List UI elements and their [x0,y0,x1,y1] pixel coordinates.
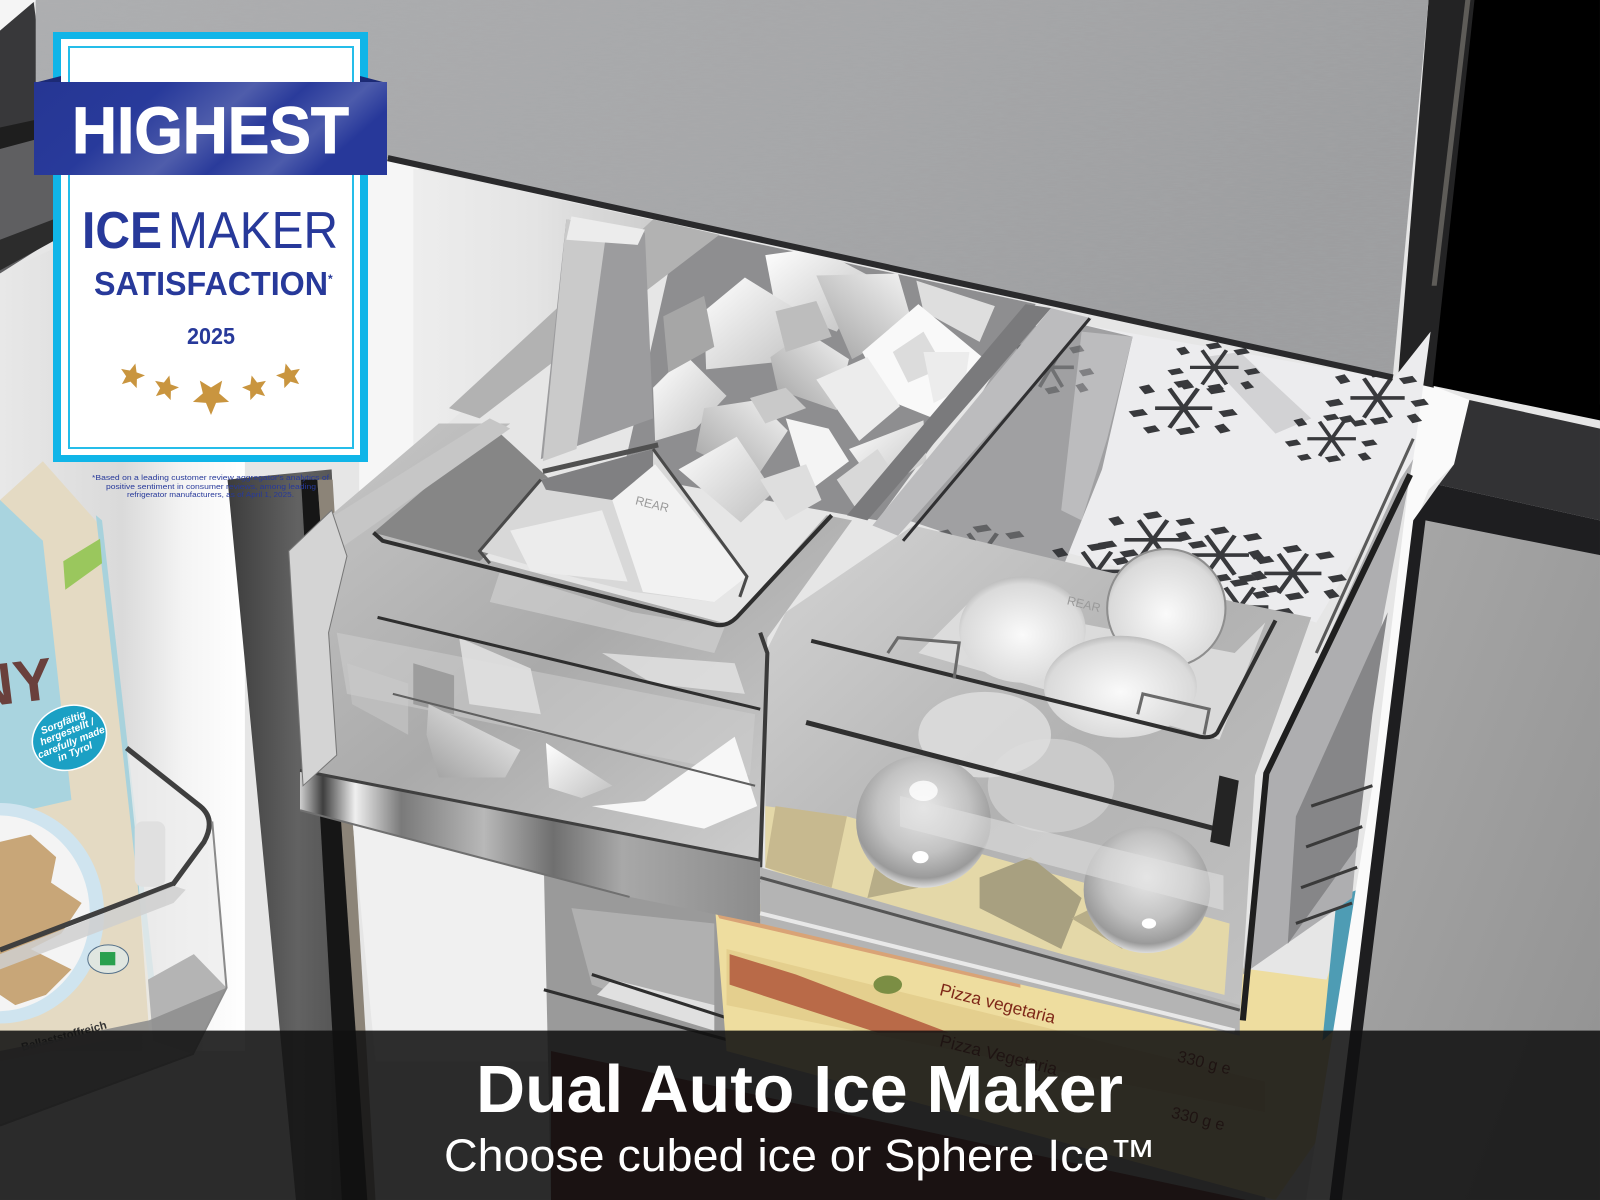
white gasket strip behind badge [359,153,429,531]
chrome front rail left [300,770,760,923]
upper right dark display [1398,0,1600,420]
left ice bin front [289,418,852,867]
cereal seal [23,694,116,781]
caption subheading: Choose cubed ice or Sphere Ice™ [444,1130,1156,1181]
pizza label: Pizza vegetaria [938,979,1058,1028]
lower right steel door [1337,515,1600,1200]
divider light strip [872,308,1092,536]
pizza boxes [551,888,1362,1200]
cereal bowl [0,803,104,1023]
lower drawer [544,867,1265,1200]
asterisk: * [328,272,333,286]
sphere ice top left [959,577,1086,683]
door bin [0,748,227,1126]
award badge [34,32,387,499]
green seal [88,945,129,973]
ribbon fold left [34,76,61,83]
cereal seal: Sorgfältig [39,709,88,737]
weight label lower: 330 g e [1169,1104,1227,1134]
sphere ice lower front [856,755,991,888]
cereal label: Ballaststoffreich [20,1020,108,1054]
upper steel door [36,0,1429,378]
sphere ice lower right [1084,827,1210,953]
center divider rail [847,304,1051,520]
sphere ice middle [1044,636,1197,738]
caption heading: Dual Auto Ice Maker [476,1052,1123,1127]
left compartment back [622,227,1036,520]
snowflake vent [1042,543,1151,598]
snowflake vent [1165,527,1274,582]
footnote: refrigerator manufacturers, as of April 1, 2025. [127,492,294,499]
white side strip right of drawer [1306,286,1469,1200]
sphere bin lower lip [900,796,1223,910]
ice cubes [653,248,995,522]
divider dark line [903,318,1090,541]
cereal flakes [0,835,82,1005]
drawer left bracket [289,510,347,786]
badge inner panel [61,39,360,455]
caption band [0,1031,1600,1200]
badge thin border [69,47,353,448]
snowflake vent [1238,545,1347,600]
snowflake vent grey [928,524,1037,580]
snowflake vent [1167,342,1260,391]
top-left white corner [0,0,37,31]
snowflake vent grey upper [1007,339,1094,394]
left dark upper door frame [0,2,61,273]
weight label: 330 g e [1176,1048,1233,1078]
ribbon fold right [360,76,387,83]
door shelf contents: cereal box [0,461,160,1061]
right sphere bin front [765,526,1311,1020]
dark bin clip [1210,776,1239,847]
footnote: *Based on a leading customer review aggregator's analytics of [92,475,329,482]
ice maker heading: ICE [82,202,162,260]
cereal seal: hergestellt / [39,716,97,748]
ribbon [34,82,387,175]
pizza label lower: Pizza Vegetaria [938,1030,1060,1079]
snowflake vent [1129,380,1238,435]
rear marking right: REAR [1066,593,1102,615]
five gold stars [117,360,304,415]
snowflake vent [1185,579,1294,634]
chrome front rail right [760,867,1240,1036]
dispenser recess [1439,400,1600,520]
snowflake vent [1325,369,1429,425]
lower white back wall [352,816,556,1061]
snowflake vent [1098,511,1207,567]
sphere ice mid row [988,739,1114,833]
back wall of freezer [327,168,673,531]
badge outer frame [53,32,368,462]
rear marking: REAR [634,493,670,515]
cereal seal: in Tyrol [56,740,94,764]
maker word: MAKER [168,202,338,260]
ribbon title: HIGHEST [72,93,349,167]
footnote [92,475,329,499]
dark vertical door gasket [228,469,376,1200]
satisfaction heading: SATISFACTION [94,265,328,302]
left door white liner [0,245,245,1051]
footnote: positive sentiment in consumer reviews, among leading [106,484,316,491]
snowflake vent [1285,414,1378,462]
bin handle marks and dark rims [340,515,1276,883]
year: 2025 [187,323,235,349]
drawer right side panel [1243,439,1413,1020]
left rail [449,219,719,418]
sphere ice top back [1107,549,1226,667]
sphere ice mid left [918,692,1051,778]
cereal seal: carefully made [36,724,107,761]
white freezer floor with snowflake vents [908,324,1431,634]
scoop [480,216,747,602]
lower right door frame [1330,485,1600,1200]
